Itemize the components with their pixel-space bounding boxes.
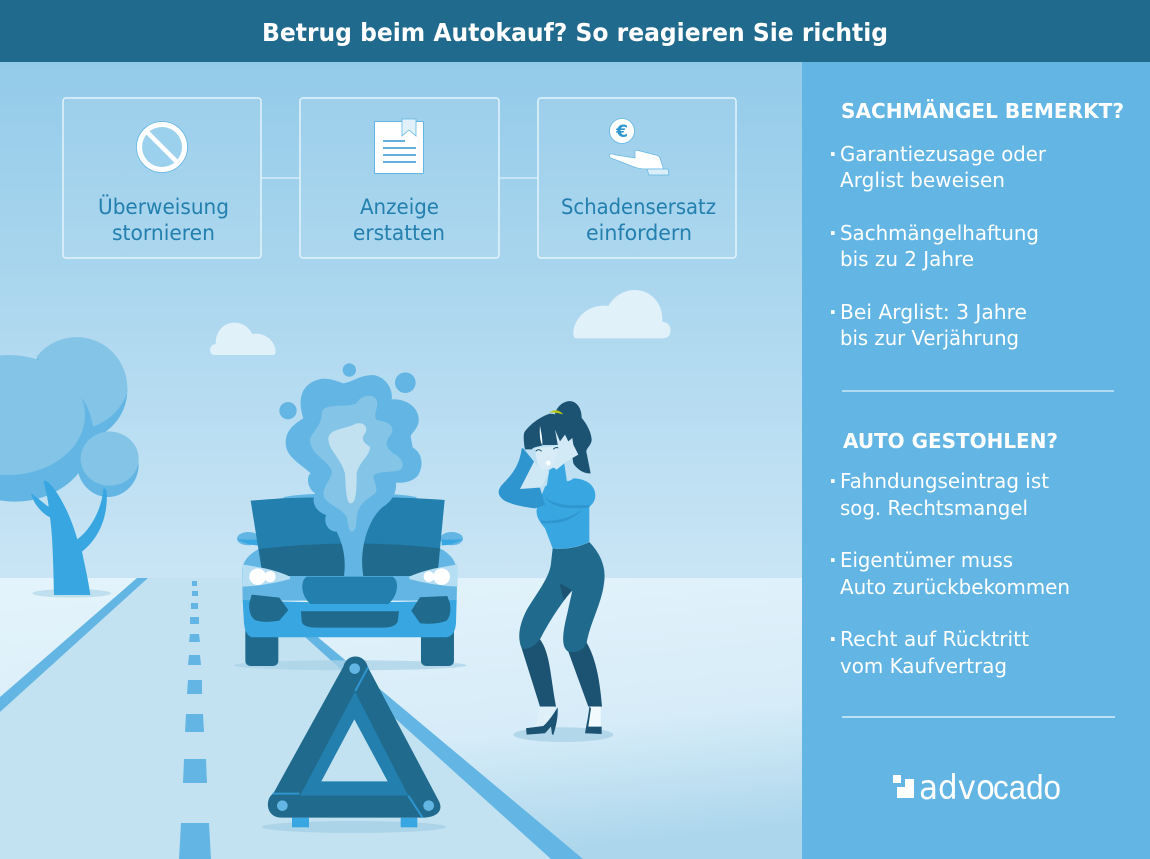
list: Sachmängel: Arglist beweisen bbox=[840, 168, 1005, 192]
list: Auto gestohlen: · bbox=[829, 627, 837, 651]
icon: prohibition sign bbox=[136, 122, 188, 172]
icon: hand with euro coin bbox=[609, 118, 669, 175]
list: Auto gestohlen: Eigentümer muss bbox=[840, 548, 1013, 572]
icon: document with bookmark bbox=[374, 119, 424, 174]
warning triangle bbox=[262, 656, 446, 833]
list: Sachmängel: bis zu 2 Jahre bbox=[840, 247, 974, 271]
label: erstatten bbox=[353, 221, 445, 245]
list: Auto gestohlen bbox=[829, 469, 1070, 678]
list: Auto gestohlen: · bbox=[829, 548, 837, 572]
label bbox=[561, 195, 716, 245]
label bbox=[98, 194, 229, 245]
step: Schadensersatz einfordern bbox=[538, 98, 736, 258]
road bbox=[0, 578, 583, 859]
list: Auto gestohlen: vom Kaufvertrag bbox=[840, 654, 1007, 678]
label: stornieren bbox=[112, 221, 215, 245]
label: Schadensersatz bbox=[561, 195, 716, 219]
list: Auto gestohlen: · bbox=[829, 469, 837, 493]
label bbox=[353, 195, 445, 245]
tree bbox=[0, 337, 139, 598]
list: Sachmängel: Bei Arglist: 3 Jahre bbox=[840, 300, 1027, 324]
list: Sachmängel: · bbox=[829, 221, 837, 245]
heading: Auto gestohlen: AUTO GESTOHLEN? bbox=[843, 429, 1058, 453]
title: Betrug beim Autokauf? So reagieren Sie richtig bbox=[262, 18, 888, 47]
label: Anzeige bbox=[360, 195, 439, 219]
ground bbox=[0, 578, 802, 859]
sky background bbox=[0, 62, 802, 578]
list: Sachmängel: Garantiezusage oder bbox=[840, 142, 1047, 166]
woman bbox=[499, 401, 613, 742]
logo: advocado: advo bbox=[919, 768, 995, 808]
road right edge stripe bbox=[305, 634, 583, 859]
header bar bbox=[0, 0, 1150, 62]
step: Anzeige erstatten bbox=[300, 98, 499, 258]
icon: hand with euro coin: € bbox=[615, 122, 628, 142]
list: Sachmängel: bis zur Verjährung bbox=[840, 326, 1019, 350]
logo: advocado bbox=[893, 768, 1061, 808]
side panel bbox=[802, 62, 1150, 859]
list: Sachmängel: · bbox=[829, 142, 837, 166]
clouds bbox=[210, 290, 671, 355]
step: Überweisung stornieren bbox=[63, 98, 261, 258]
list: Auto gestohlen: Auto zurückbekommen bbox=[840, 575, 1070, 599]
heading: Sachmängel bemerkt: SACHMÄNGEL BEMERKT? bbox=[841, 99, 1124, 123]
logo: advocado: cado bbox=[993, 769, 1061, 807]
list: Auto gestohlen: Recht auf Rücktritt bbox=[840, 627, 1029, 651]
list: Sachmängel bbox=[829, 142, 1047, 350]
list: Auto gestohlen: sog. Rechtsmangel bbox=[840, 496, 1028, 520]
label: einfordern bbox=[586, 221, 692, 245]
road centre dashes bbox=[179, 581, 211, 859]
list: Auto gestohlen: Fahndungseintrag ist bbox=[840, 469, 1049, 493]
list: Sachmängel: Sachmängelhaftung bbox=[840, 221, 1039, 245]
car with smoke bbox=[233, 363, 467, 670]
connector lines between boxes bbox=[261, 177, 538, 179]
road left edge line bbox=[0, 578, 148, 712]
list: Sachmängel: · bbox=[829, 300, 837, 324]
label: Überweisung bbox=[98, 194, 229, 219]
